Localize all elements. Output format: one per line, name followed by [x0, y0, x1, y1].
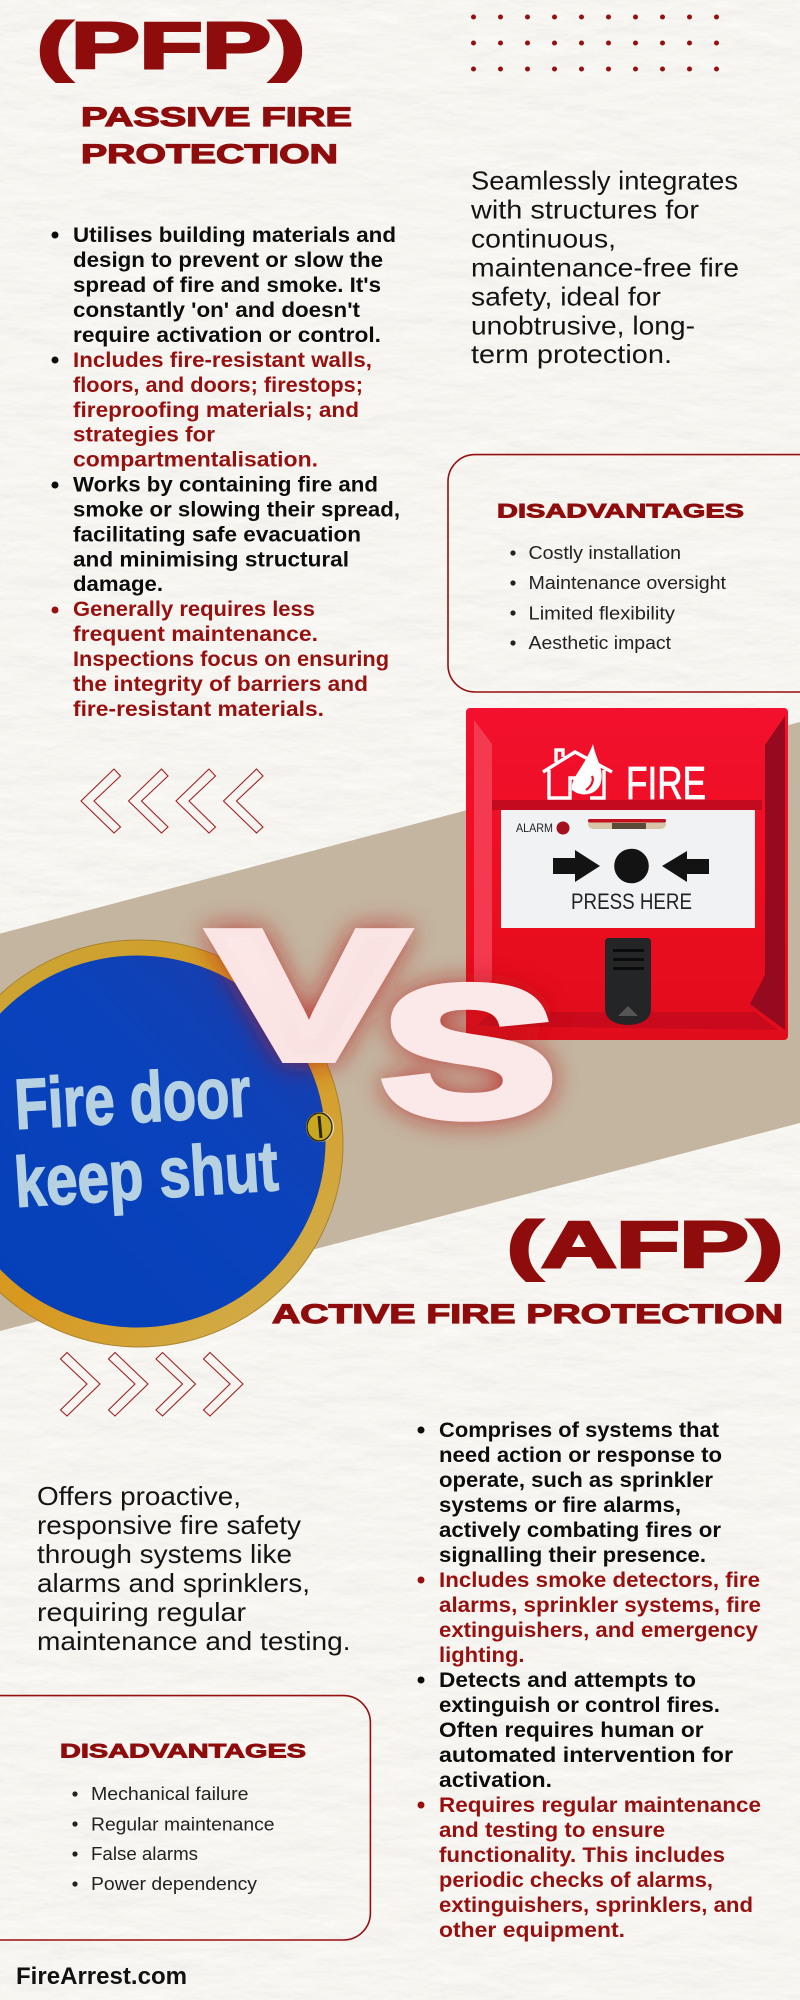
PFP bullet list: Inspections focus on ensuring — [73, 648, 389, 671]
PFP bullet list: require activation or control. — [73, 324, 381, 347]
heading: passive fire protection: PASSIVE FIRE — [81, 102, 352, 132]
PFP bullet list: fireproofing materials; and — [73, 399, 359, 422]
list: AFP disadvantages: Mechanical failure — [91, 1784, 248, 1804]
list: PFP disadvantages: Aesthetic impact — [528, 633, 671, 653]
chevrons pointing right — [60, 1352, 243, 1416]
AFP summary paragraph: maintenance and testing. — [37, 1626, 350, 1656]
photo: red fire alarm call point — [466, 708, 788, 1040]
press here label: PRESS HERE — [571, 889, 692, 914]
blue plate — [0, 956, 326, 1328]
AFP summary paragraph: Offers proactive, — [37, 1481, 241, 1511]
AFP bullet list: functionality. This includes — [439, 1844, 725, 1867]
brass ring — [0, 940, 343, 1347]
PFP bullet list: and minimising structural — [73, 548, 349, 572]
AFP bullet list: Often requires human or — [439, 1719, 704, 1742]
PFP summary paragraph: with structures for — [470, 195, 699, 225]
PFP bullet list — [52, 224, 400, 721]
black latch — [605, 938, 651, 1025]
AFP summary paragraph — [37, 1481, 350, 1656]
AFP bullet list: and testing to ensure — [439, 1819, 665, 1842]
PFP bullet list: facilitating safe evacuation — [73, 524, 361, 546]
arrows and press target — [553, 849, 709, 883]
red glow behind letters — [211, 893, 556, 1155]
brass screw — [306, 1112, 334, 1142]
chevrons pointing left — [81, 769, 263, 833]
AFP summary paragraph: alarms and sprinklers, — [37, 1568, 310, 1598]
PFP summary paragraph: maintenance-free fire — [471, 252, 739, 282]
PFP bullet list: Includes fire-resistant walls, — [73, 349, 372, 372]
list: PFP disadvantages: Maintenance oversight — [528, 573, 726, 593]
AFP bullet list: alarms, sprinkler systems, fire — [439, 1594, 761, 1617]
list: PFP disadvantages: Costly installation — [528, 543, 681, 563]
AFP bullet list: signalling their presence. — [439, 1544, 706, 1567]
AFP summary paragraph: responsive fire safety — [37, 1510, 301, 1540]
PFP bullet list: constantly 'on' and doesn't — [73, 299, 360, 322]
PFP bullet list: Generally requires less — [73, 598, 315, 621]
alarm indicator: ALARM — [516, 823, 553, 835]
letter V: V — [211, 893, 406, 1097]
glass slot — [588, 819, 666, 829]
heading: disadvantages: DISADVANTAGES — [60, 1740, 306, 1762]
PFP bullet list: damage. — [73, 573, 163, 596]
decorative dot grid — [471, 14, 719, 72]
list: AFP disadvantages: False alarms — [91, 1844, 198, 1864]
PFP bullet list: spread of fire and smoke. It's — [73, 274, 381, 297]
list: AFP disadvantages: Power dependency — [91, 1874, 257, 1894]
title: PFP: (PFP) — [37, 9, 305, 82]
PFP bullet list: the integrity of barriers and — [73, 673, 368, 696]
list: AFP disadvantages — [72, 1784, 275, 1894]
AFP bullet list: automated intervention for — [439, 1744, 733, 1767]
AFP bullet list: Includes smoke detectors, fire — [439, 1569, 760, 1592]
panel: AFP disadvantages — [0, 1696, 370, 1940]
PFP summary paragraph — [470, 166, 739, 369]
AFP bullet list: periodic checks of alarms, — [439, 1869, 713, 1892]
PFP bullet list: smoke or slowing their spread, — [73, 498, 400, 522]
AFP bullet list: other equipment. — [439, 1919, 625, 1942]
AFP bullet list: Detects and attempts to — [439, 1669, 696, 1692]
PFP summary paragraph: Seamlessly integrates — [471, 166, 738, 196]
icon: house on fire — [543, 744, 612, 798]
sign text: fire door: Fire door — [12, 1053, 253, 1145]
PFP bullet list: Works by containing fire and — [73, 474, 378, 496]
AFP bullet list: operate, such as sprinkler — [439, 1469, 713, 1492]
PFP bullet list: floors, and doors; firestops; — [73, 374, 363, 397]
PFP bullet list: design to prevent or slow the — [73, 249, 383, 272]
AFP bullet list: need action or response to — [439, 1444, 722, 1467]
AFP bullet list: Requires regular maintenance — [439, 1794, 761, 1817]
AFP summary paragraph: requiring regular — [37, 1597, 246, 1627]
heading: passive fire protection — [81, 102, 352, 169]
white label panel — [501, 810, 755, 928]
alarm indicator — [516, 822, 570, 835]
PFP bullet list: Utilises building materials and — [73, 224, 396, 247]
photo: fire door sign — [0, 940, 343, 1347]
panel: PFP disadvantages — [448, 455, 800, 692]
footer: website: FireArrest.com — [16, 1963, 187, 1990]
AFP bullet list: extinguishers, and emergency — [439, 1619, 758, 1642]
heading: disadvantages: DISADVANTAGES — [497, 500, 744, 522]
diagonal tan band — [0, 722, 800, 1331]
red glow behind letters: S — [381, 949, 556, 1155]
PFP bullet list: compartmentalisation. — [73, 448, 318, 472]
AFP bullet list: actively combating fires or — [439, 1519, 721, 1542]
PFP summary paragraph: continuous, — [471, 224, 616, 254]
PFP summary paragraph: unobtrusive, long- — [471, 310, 695, 340]
PFP bullet list: fire-resistant materials. — [73, 698, 324, 721]
AFP bullet list: extinguishers, sprinklers, and — [439, 1894, 753, 1917]
fire label: FIRE — [626, 757, 706, 809]
PFP bullet list: strategies for — [73, 424, 215, 446]
heading: passive fire protection: PROTECTION — [81, 139, 338, 169]
VS lettering — [211, 893, 556, 1155]
AFP bullet list — [418, 1419, 761, 1942]
AFP bullet list: activation. — [439, 1769, 552, 1792]
title: AFP: (AFP) — [507, 1208, 783, 1281]
letter S: S — [381, 949, 556, 1155]
AFP summary paragraph: through systems like — [37, 1539, 292, 1569]
heading: active fire protection: ACTIVE FIRE PROTECTION — [272, 1299, 783, 1329]
AFP bullet list: extinguish or control fires. — [439, 1694, 720, 1717]
PFP summary paragraph: safety, ideal for — [471, 281, 661, 311]
list: AFP disadvantages: Regular maintenance — [91, 1814, 274, 1834]
sign text: keep shut: keep shut — [12, 1127, 280, 1223]
list: PFP disadvantages: Limited flexibility — [528, 604, 675, 624]
AFP bullet list: Comprises of systems that — [439, 1419, 719, 1442]
red glow behind letters: V — [211, 893, 406, 1097]
PFP bullet list: frequent maintenance. — [73, 623, 318, 646]
AFP bullet list: lighting. — [439, 1644, 524, 1667]
AFP bullet list: systems or fire alarms, — [439, 1494, 681, 1517]
list: PFP disadvantages — [510, 543, 726, 653]
PFP summary paragraph: term protection. — [471, 339, 672, 369]
